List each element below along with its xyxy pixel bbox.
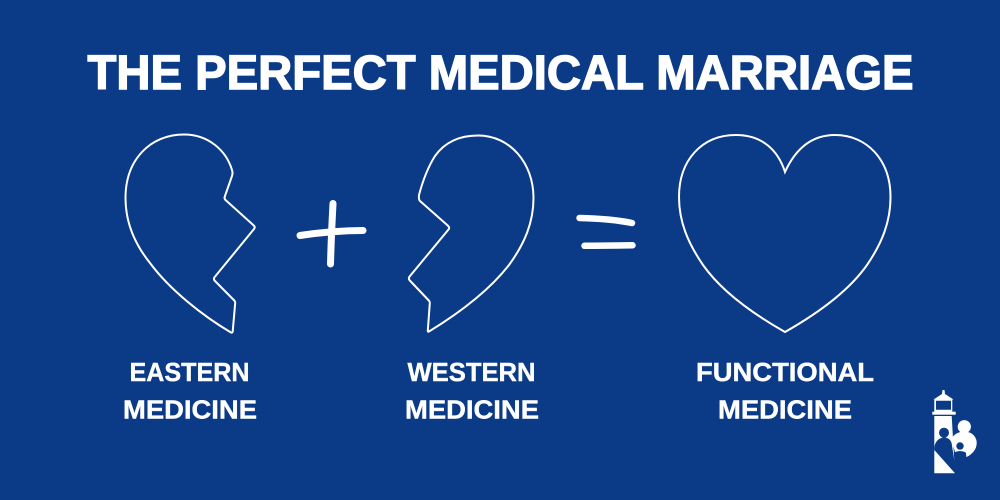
label: eastern medicine: MEDICINE: [123, 394, 257, 424]
icon: whole heart (functional medicine): [679, 135, 890, 332]
label: eastern medicine: EASTERN: [130, 357, 250, 387]
label: western medicine: WESTERN: [408, 357, 536, 387]
icon: equals sign: [580, 218, 632, 246]
label: functional medicine: MEDICINE: [718, 394, 852, 424]
icon: plus sign: [300, 204, 363, 264]
label: functional medicine: [696, 357, 874, 424]
label: western medicine: MEDICINE: [405, 394, 539, 424]
label: functional medicine: FUNCTIONAL: [696, 357, 874, 387]
label: western medicine: [405, 357, 539, 424]
icon: left half heart (eastern medicine): [126, 134, 255, 333]
label: eastern medicine: [123, 357, 257, 424]
title: THE PERFECT MEDICAL MARRIAGE: [88, 47, 914, 100]
icon: lighthouse and family logo: [932, 390, 977, 473]
icon: right half heart (western medicine): [409, 136, 534, 332]
